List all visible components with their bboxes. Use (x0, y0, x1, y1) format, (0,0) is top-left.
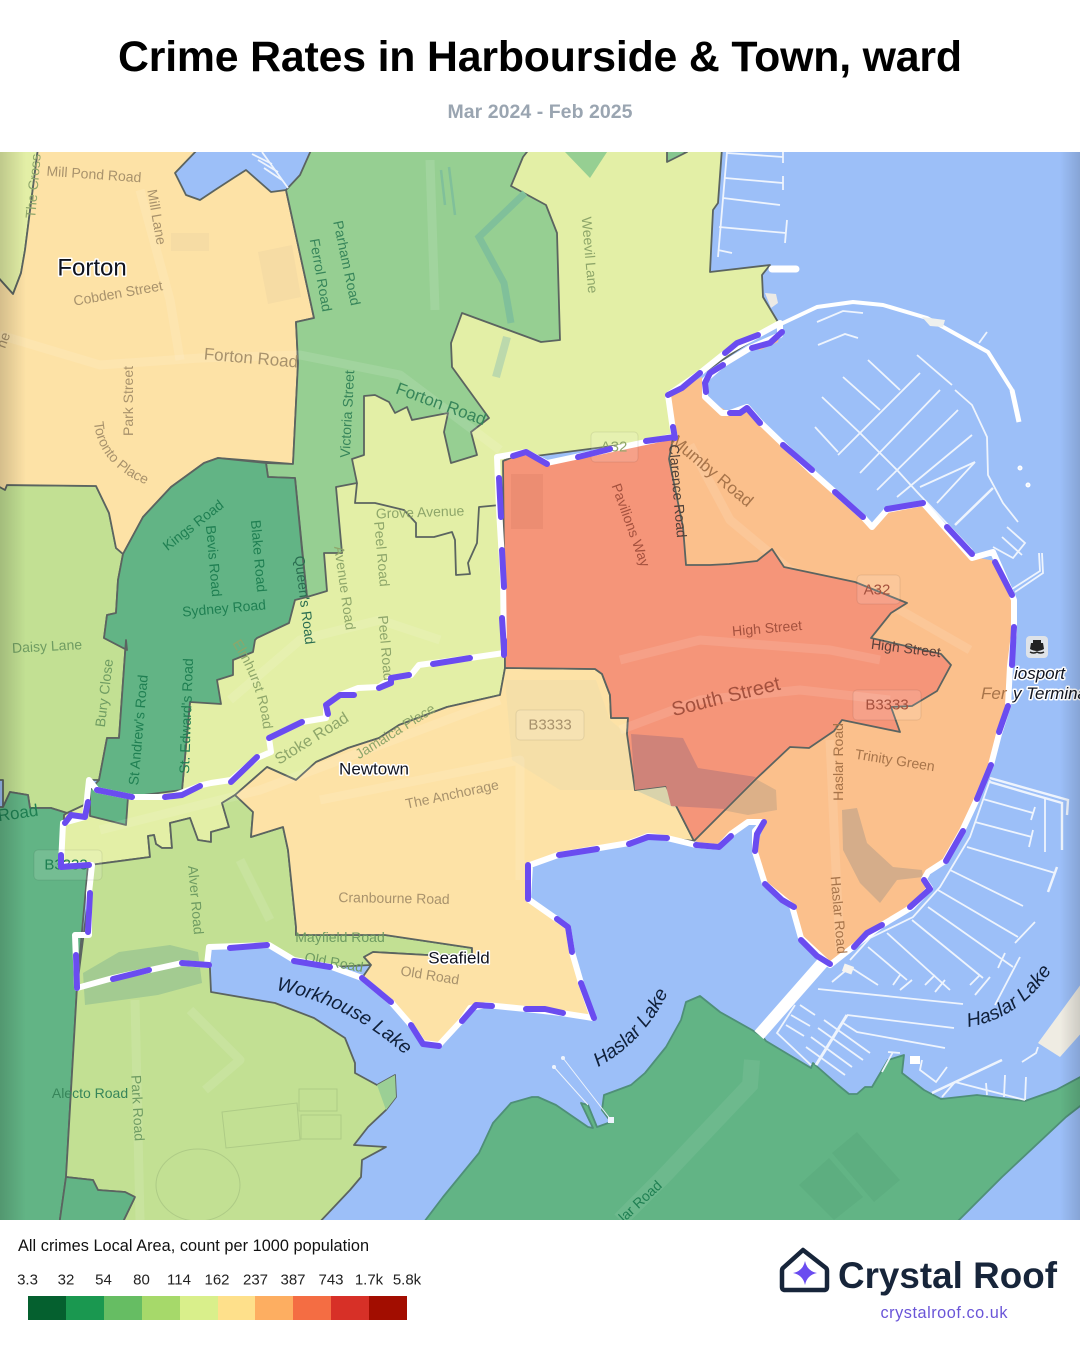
purple ward boundary dashes (61, 332, 1014, 1046)
map labels: streets: The Cross (22, 153, 44, 219)
region: dark green west column (0, 792, 88, 1226)
map labels: streets: Jamaica Place (352, 700, 438, 762)
road number shields: A32 (601, 438, 627, 456)
legend scale values: 114 (167, 1272, 191, 1288)
map labels: streets: Cobden Street (72, 277, 164, 309)
map labels: streets: Elmhurst Road (232, 639, 274, 728)
map labels: streets: High Street (731, 617, 803, 639)
map labels: streets: Victoria Street (337, 370, 357, 458)
map labels: streets: Sydney Road (181, 596, 267, 620)
map labels: streets: Old Road (400, 962, 460, 988)
map labels: streets: Kings Road (160, 496, 226, 554)
map labels: streets: Forton Road (203, 344, 299, 372)
map labels: streets: Trinity Green (854, 746, 936, 774)
map labels: streets: Alver Road (185, 865, 207, 935)
logo: Crystal Roof (782, 1250, 1058, 1322)
map labels: streets: Toronto Place (94, 421, 148, 484)
minor road network (0, 160, 520, 1220)
map labels: streets: Cranbourne Road (338, 889, 450, 907)
region: dark green south peninsula (421, 996, 1080, 1226)
ward boundary white outline (61, 323, 1014, 1045)
map labels: streets: St. Edward's Road (176, 658, 196, 774)
water labels: Haslar Lake (594, 990, 666, 1067)
water labels: Haslar Lake (968, 966, 1050, 1027)
legend scale values (17, 1272, 422, 1288)
map labels: streets: Mayfield Road (295, 929, 385, 945)
legend colour bar (28, 1296, 407, 1320)
region: red centre (503, 438, 951, 841)
road number shields: A32 (864, 582, 890, 598)
legend scale values: 32 (58, 1272, 74, 1288)
map labels: streets: St Andrew's Road (125, 674, 151, 786)
water labels: Workhouse Lake (279, 977, 410, 1052)
map labels: streets: Weevil Lane (579, 216, 601, 294)
map labels: streets: Old Road (303, 949, 365, 975)
map labels: streets (0, 154, 975, 1265)
label: Gosport Ferry Terminal (981, 664, 1080, 703)
region: dark green south-west patch (59, 1177, 135, 1226)
map edge shading (0, 152, 1080, 1220)
map labels: streets: Parham Road (330, 219, 364, 307)
map labels: streets: Clarence Road (666, 444, 690, 538)
map labels: streets: Blake Road (248, 519, 270, 593)
map labels: streets: Bury Close (92, 658, 116, 728)
map labels: streets: Forton Road (393, 379, 489, 429)
region: pale green central area (0, 148, 778, 865)
label: Gosport Ferry Terminal: Fer (981, 684, 1008, 703)
region: mid green north (266, 148, 687, 597)
place labels: Seafield (428, 948, 490, 968)
legend scale values: 3.3 (17, 1272, 38, 1288)
legend scale values: 237 (243, 1272, 268, 1288)
map labels: streets: Peel Road (371, 521, 393, 587)
map labels: streets: Haslar Road (830, 723, 846, 801)
small marina in Forton bay (252, 152, 288, 188)
legend scale values: 387 (280, 1272, 306, 1288)
Haslar breakwater (759, 961, 824, 1035)
map labels: streets: Haslar Road (828, 876, 850, 954)
map labels: streets: lar Road (615, 1177, 665, 1225)
road number shields (34, 432, 921, 880)
label: Gosport Ferry Terminal: iosport (1014, 664, 1066, 683)
map labels: streets: The Anchorage (404, 776, 500, 812)
region: orange east (668, 332, 1014, 963)
title: Crime Rates in Harbourside & Town, ward (118, 33, 962, 81)
map labels: streets: Mill Lane (144, 188, 170, 246)
region: Forton yellow (0, 148, 314, 554)
icon: ferry terminal (1026, 636, 1048, 658)
place labels: Forton (57, 254, 127, 282)
map labels: streets: Peel Road (375, 615, 397, 681)
map labels: streets: Stoke Road (272, 710, 352, 768)
road number shields: B3333 (44, 856, 88, 874)
region: dark green Kings Road (90, 458, 307, 825)
map labels: streets: Park Street (120, 366, 136, 436)
water labels (279, 966, 1050, 1067)
map labels: streets: Queen's Road (292, 555, 318, 645)
map labels: streets: Mumby Road (667, 431, 757, 511)
legend scale values: 743 (318, 1272, 344, 1288)
legend scale values: 1.7k (355, 1272, 384, 1288)
website url: crystalroof.co.uk (880, 1304, 1008, 1322)
region: light green south-west (66, 795, 472, 1226)
map labels: streets: Grove Avenue (376, 502, 465, 522)
legend (17, 1237, 422, 1320)
water background (0, 152, 1080, 1220)
map labels: streets: Bevis Road (203, 525, 225, 597)
map labels: streets: Avenue Road (331, 545, 359, 631)
map labels: streets: Pavilions Way (609, 481, 653, 569)
legend scale values: 54 (95, 1272, 112, 1288)
lower marina jetties (552, 778, 1068, 1123)
beige pier at bottom right (1038, 980, 1080, 1057)
place labels (57, 254, 490, 968)
legend scale values: 80 (133, 1272, 150, 1288)
map labels: streets: Park Road (128, 1075, 148, 1141)
subtitle: date range: Mar 2024 - Feb 2025 (448, 101, 633, 123)
road number shields: B3333 (865, 696, 909, 714)
map labels: streets: High Street (870, 636, 942, 660)
region: left light green (0, 485, 127, 813)
breakwater and pier (765, 269, 1030, 486)
map labels: streets: South Street (669, 673, 783, 721)
icon: house with star (782, 1250, 827, 1290)
map labels: streets: Alecto Road (52, 1085, 128, 1101)
map labels: streets: Mill Pond Road (46, 163, 142, 185)
upper marina jetties (718, 152, 1043, 592)
region: Newtown yellow (235, 668, 694, 1045)
legend scale values: 5.8k (393, 1272, 422, 1288)
place labels: Newtown (339, 760, 409, 778)
legend scale values: 162 (204, 1272, 230, 1288)
map labels: streets: Ferrol Road (307, 237, 335, 313)
road number shields: B3333 (528, 716, 572, 734)
map (0, 152, 1080, 1220)
legend title: All crimes Local Area, count per 1000 population (18, 1237, 369, 1255)
logo wordmark: Crystal Roof (838, 1255, 1058, 1296)
map labels: streets: Daisy Lane (12, 636, 83, 656)
